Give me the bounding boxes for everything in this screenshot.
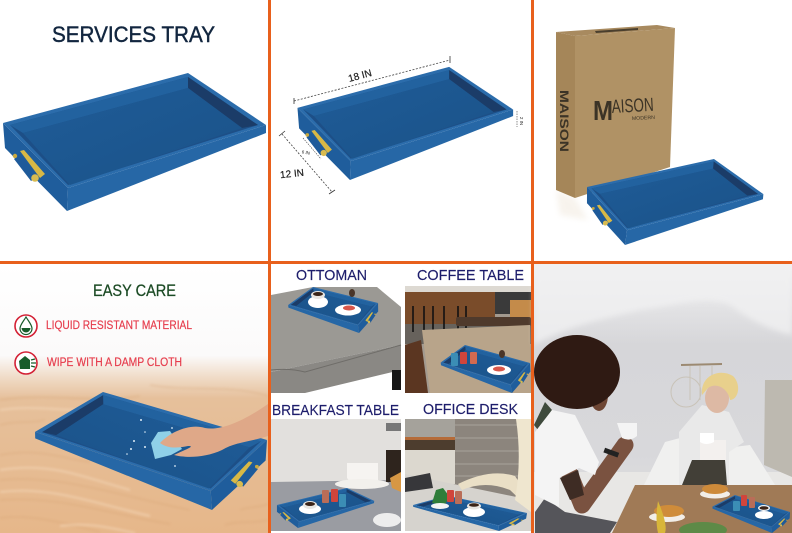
wall art [764, 380, 792, 477]
panel: dimensions [279, 56, 524, 194]
panel: lifestyle photo [534, 264, 792, 533]
wooden table [612, 485, 792, 533]
panel: packaging [556, 25, 766, 249]
tray product image [3, 73, 266, 211]
box front logo: AISON [611, 95, 654, 118]
wood highlights [0, 408, 150, 533]
sponge [151, 431, 182, 459]
heading: ottoman: OTTOMAN [296, 268, 367, 284]
bed [644, 438, 775, 485]
heading: office desk: OFFICE DESK [423, 402, 518, 418]
food plates [649, 484, 730, 533]
tray being wiped [34, 389, 268, 512]
photo: coffee table [405, 286, 534, 393]
dream catcher [671, 364, 722, 407]
wood grain [0, 385, 268, 532]
heading: EASY CARE [93, 281, 176, 300]
panel: services tray [3, 22, 266, 211]
box reflection [556, 190, 588, 220]
title: SERVICES TRAY [52, 22, 215, 47]
wall [534, 264, 792, 533]
wall light [534, 264, 792, 345]
dimension: height 2 in: 2 IN [519, 117, 524, 125]
feature text: LIQUID RESISTANT MATERIAL [46, 320, 193, 332]
dimension: handle 6 in: 6 IN [301, 149, 310, 156]
dimension: height 2 in [517, 111, 524, 127]
panel: use cases [271, 268, 534, 533]
panel: easy care [0, 264, 268, 533]
box front logo: M [593, 95, 613, 126]
items on tray [733, 495, 773, 519]
photo: breakfast table [271, 419, 401, 531]
wood table background [0, 264, 268, 533]
water droplets [126, 419, 176, 467]
cardboard box [556, 25, 675, 198]
plant [534, 402, 552, 430]
left woman [534, 335, 637, 533]
tray with dimensions [297, 67, 513, 180]
tray in front of box [582, 155, 766, 249]
dimension: width 12 in [279, 131, 335, 194]
dimension: width 12 in: 12 IN [280, 168, 305, 181]
tray on table [712, 493, 791, 533]
photo: office desk [405, 419, 531, 533]
box front logo [593, 95, 655, 126]
dimension: handle 6 in [301, 138, 321, 159]
photo: ottoman [271, 286, 401, 393]
dimension: length 18 in [294, 56, 450, 104]
right woman [679, 373, 744, 485]
dimension: length 18 in: 18 IN [347, 68, 373, 85]
box front logo: MODERN [632, 115, 655, 122]
hand [160, 404, 268, 457]
floor [534, 472, 792, 533]
heading: breakfast table: BREAKFAST TABLE [272, 403, 399, 419]
box side logo: MAISON [557, 90, 571, 152]
feature text: WIPE WITH A DAMP CLOTH [47, 357, 182, 369]
icon: wiping cloth [15, 352, 37, 374]
heading: coffee table: COFFEE TABLE [417, 268, 524, 284]
icon: liquid drop [15, 315, 37, 337]
